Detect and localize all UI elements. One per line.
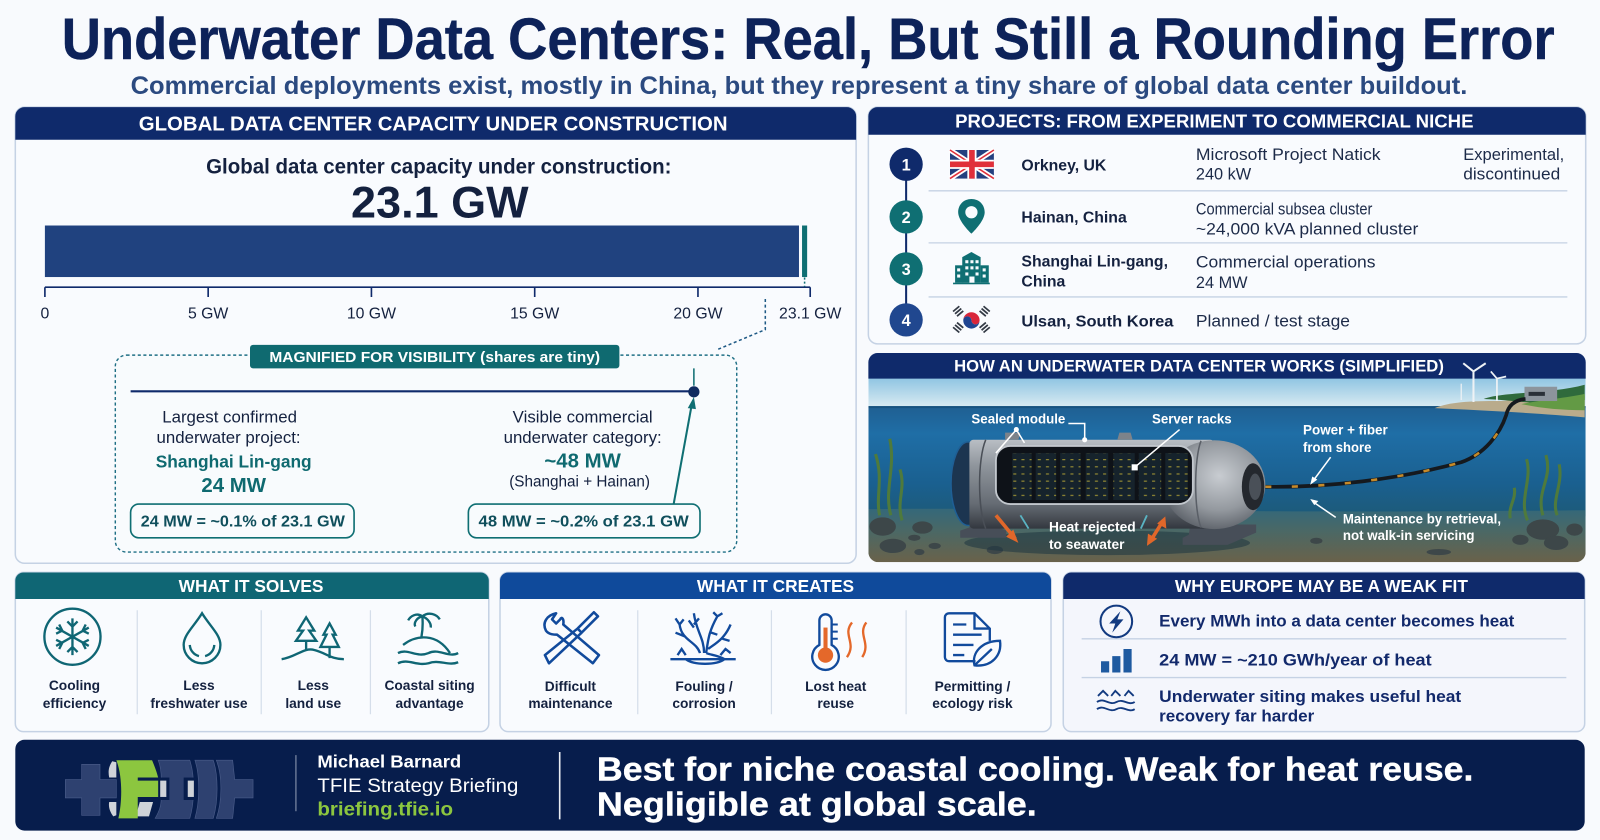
illustration labels: to seawater bbox=[1049, 537, 1125, 552]
timeline of numbered projects: 1 bbox=[902, 156, 911, 174]
bar chart: capacity vs underwater share: 10 GW bbox=[347, 305, 396, 322]
callout: magnified view bbox=[115, 345, 737, 552]
bar chart: capacity vs underwater share bbox=[40, 226, 841, 322]
icon: energy bolt bbox=[1101, 606, 1132, 637]
panel: how it works bbox=[868, 353, 1586, 562]
icon: permit document with leaf bbox=[945, 613, 1000, 666]
bottom line message: Best for niche coastal cooling. Weak for heat reuse. bbox=[597, 752, 1473, 789]
project locations: Ulsan, South Korea bbox=[1021, 314, 1174, 331]
magnified scale line bbox=[131, 368, 699, 397]
solves labels: Less bbox=[183, 678, 215, 693]
timeline of numbered projects: 4 bbox=[902, 312, 911, 330]
Europe reasons: 24 MW = ~210 GWh/year of heat bbox=[1159, 651, 1432, 669]
icon: trees on land bbox=[282, 617, 344, 659]
tank body bbox=[950, 441, 970, 526]
creates labels: ecology risk bbox=[932, 696, 1013, 711]
project details: Commercial operations bbox=[1196, 253, 1376, 271]
callout connector bbox=[716, 299, 765, 350]
panel: what it solves bbox=[15, 572, 489, 732]
illustration labels: Heat rejected bbox=[1049, 520, 1136, 535]
illustration: subsea module bbox=[868, 378, 1586, 562]
illustration labels bbox=[971, 411, 1501, 552]
illustration labels: Server racks bbox=[1152, 411, 1232, 426]
text: largest project: 24 MW bbox=[201, 475, 267, 497]
bottom line message bbox=[597, 752, 1473, 823]
Europe reasons bbox=[1159, 613, 1515, 725]
subtitle: Commercial deployments exist, mostly in China, but they represent a tiny share of global data center buildout. bbox=[131, 72, 1467, 100]
illustration labels: not walk-in servicing bbox=[1343, 528, 1474, 543]
Europe reasons: recovery far harder bbox=[1159, 707, 1315, 725]
creates labels: corrosion bbox=[672, 696, 736, 711]
icon: South Korea flag bbox=[953, 306, 990, 333]
share box: 24 MW bbox=[131, 504, 354, 538]
attribution: briefing.tfie.io bbox=[317, 798, 453, 820]
feet bbox=[960, 524, 1256, 545]
text: largest project: Shanghai Lin-gang bbox=[156, 451, 312, 471]
project details: ~24,000 kVA planned cluster bbox=[1196, 221, 1419, 239]
panel: projects bbox=[868, 107, 1586, 344]
footer banner bbox=[15, 740, 1585, 831]
text: largest project bbox=[156, 407, 312, 497]
share box: 24 MW: 24 MW = ~0.1% of 23.1 GW bbox=[141, 514, 345, 531]
text: commercial category bbox=[504, 407, 662, 491]
text: commercial category: underwater category: bbox=[504, 428, 662, 447]
project details: discontinued bbox=[1463, 166, 1560, 184]
icon: map pin bbox=[958, 199, 985, 234]
solves labels: Less bbox=[298, 678, 329, 693]
solves labels: Coastal siting bbox=[384, 678, 475, 693]
solves labels: Cooling bbox=[49, 678, 100, 693]
text: commercial category: (Shanghai + Hainan) bbox=[509, 474, 650, 491]
icon: bars bbox=[1101, 649, 1132, 672]
seabed shadow under tank bbox=[964, 531, 1250, 555]
creates labels: Permitting / bbox=[935, 679, 1010, 694]
icon: water drop bbox=[184, 613, 220, 663]
project locations: Orkney, UK bbox=[1021, 157, 1107, 174]
cable bbox=[1265, 399, 1526, 487]
panel heading: solves: WHAT IT SOLVES bbox=[179, 576, 323, 596]
icon: island with palm bbox=[398, 614, 458, 664]
project details: Commercial subsea cluster bbox=[1196, 200, 1373, 218]
server window bbox=[996, 446, 1193, 504]
text: commercial category: Visible commercial bbox=[513, 407, 653, 426]
creates labels: Difficult bbox=[545, 679, 596, 694]
panel heading: capacity: GLOBAL DATA CENTER CAPACITY UNDER CONSTRUCTION bbox=[139, 114, 728, 136]
arrow to marker bbox=[673, 397, 696, 505]
text: largest project: Largest confirmed bbox=[162, 407, 297, 426]
text: commercial category: ~48 MW bbox=[544, 450, 622, 472]
icon: thermometer with heat bbox=[812, 614, 866, 670]
panel: what it creates bbox=[500, 572, 1051, 732]
attribution: Michael Barnard bbox=[317, 751, 461, 771]
timeline of numbered projects bbox=[889, 148, 923, 337]
icon: waves bbox=[1097, 691, 1135, 710]
bar chart: capacity vs underwater share: 5 GW bbox=[188, 305, 228, 322]
illustration labels: Maintenance by retrieval, bbox=[1343, 511, 1501, 526]
panel: why Europe bbox=[1063, 572, 1585, 732]
creates labels: Lost heat bbox=[805, 679, 867, 694]
shore with station bbox=[1435, 385, 1585, 417]
panel heading: creates: WHAT IT CREATES bbox=[697, 576, 854, 596]
illustration labels: Power + fiber bbox=[1303, 423, 1388, 438]
project details: 24 MW bbox=[1196, 274, 1248, 292]
bar chart: capacity vs underwater share: 15 GW bbox=[510, 305, 559, 322]
creates labels: Fouling / bbox=[675, 679, 733, 694]
creates labels: maintenance bbox=[528, 696, 613, 711]
capacity label: Global data center capacity under construction: bbox=[206, 155, 671, 178]
creates labels bbox=[528, 679, 1013, 711]
icon: buildings bbox=[953, 252, 990, 284]
bar chart: capacity vs underwater share: 0 bbox=[40, 305, 49, 322]
project locations: Shanghai Lin-gang, bbox=[1021, 253, 1168, 270]
seaweed bbox=[876, 439, 1560, 520]
project locations: Hainan, China bbox=[1021, 209, 1127, 226]
bar chart: capacity vs underwater share: 20 GW bbox=[673, 305, 723, 322]
magnified label pill bbox=[250, 345, 619, 368]
rocks bbox=[869, 517, 1583, 555]
timeline of numbered projects: 2 bbox=[902, 209, 911, 227]
share box: 48 MW bbox=[468, 504, 700, 538]
leader dots and arrowheads bbox=[1014, 427, 1318, 505]
attribution bbox=[317, 751, 518, 820]
text: largest project: underwater project: bbox=[157, 428, 301, 447]
heat arrows bbox=[996, 515, 1163, 542]
panel heading: projects: PROJECTS: FROM EXPERIMENT TO COMMERCIAL NICHE bbox=[955, 111, 1473, 132]
illustration labels: from shore bbox=[1303, 440, 1372, 455]
bottom line message: Negligible at global scale. bbox=[597, 786, 1037, 823]
logo: TFIE bbox=[65, 760, 253, 818]
project details: Experimental, bbox=[1463, 146, 1564, 164]
project details: Microsoft Project Natick bbox=[1196, 146, 1382, 164]
attribution: TFIE Strategy Briefing bbox=[317, 775, 518, 797]
panel heading: Europe: WHY EUROPE MAY BE A WEAK FIT bbox=[1175, 576, 1468, 596]
solves labels bbox=[43, 678, 475, 711]
Europe reasons: Underwater siting makes useful heat bbox=[1159, 688, 1462, 706]
Europe reasons: Every MWh into a data center becomes heat bbox=[1159, 613, 1515, 631]
icon: snowflake bbox=[44, 609, 101, 665]
icon: wrench and screwdriver bbox=[544, 612, 599, 663]
coolant marks bbox=[1020, 515, 1147, 529]
bar chart: capacity vs underwater share: 23.1 GW bbox=[779, 305, 841, 322]
wind turbines bbox=[1461, 363, 1506, 402]
panel heading: how it works: HOW AN UNDERWATER DATA CENTER WORKS (SIMPLIFIED) bbox=[954, 356, 1444, 375]
project details: 240 kW bbox=[1196, 166, 1252, 184]
project locations: China bbox=[1021, 274, 1066, 291]
share box: 48 MW: 48 MW = ~0.2% of 23.1 GW bbox=[479, 514, 689, 531]
leader lines bbox=[996, 423, 1336, 517]
icon: UK flag bbox=[950, 150, 994, 179]
project details: Planned / test stage bbox=[1196, 313, 1350, 331]
icon: coral bbox=[670, 612, 736, 664]
creates labels: reuse bbox=[817, 696, 854, 711]
capacity value: 23.1 GW bbox=[351, 176, 529, 227]
project details bbox=[1196, 146, 1564, 331]
magnified label pill: MAGNIFIED FOR VISIBILITY (shares are tiny) bbox=[269, 350, 600, 366]
solves labels: advantage bbox=[396, 696, 464, 711]
timeline of numbered projects: 3 bbox=[902, 261, 911, 279]
project locations bbox=[1021, 157, 1174, 331]
solves labels: efficiency bbox=[43, 696, 107, 711]
illustration labels: Sealed module bbox=[971, 411, 1066, 426]
panel: global capacity bbox=[15, 107, 856, 563]
solves labels: freshwater use bbox=[150, 696, 248, 711]
solves labels: land use bbox=[285, 696, 342, 711]
